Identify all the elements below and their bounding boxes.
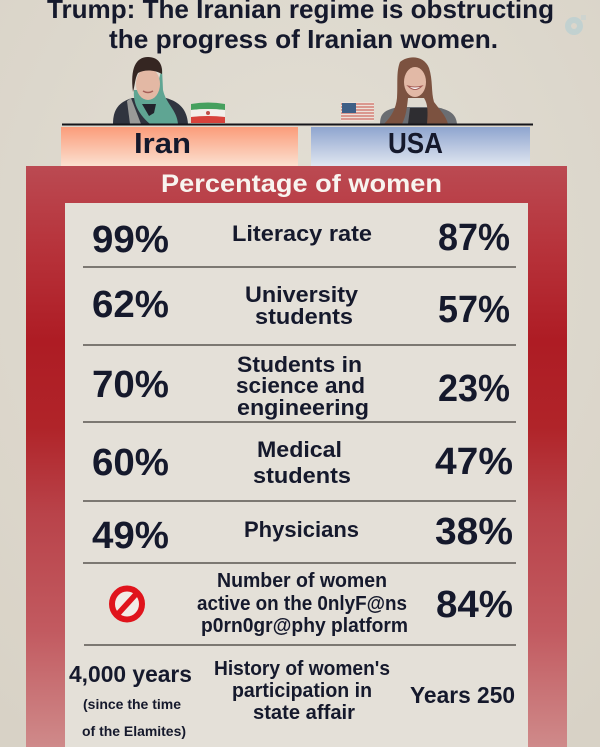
- photo: Iranian woman: [113, 57, 188, 124]
- row: medical students: [92, 437, 513, 488]
- icon: Iran flag: [191, 102, 225, 123]
- row: OnlyFans: Number of women: [217, 570, 387, 592]
- row: university students: 62%: [92, 284, 169, 326]
- row: physicians: Physicians: [244, 517, 359, 542]
- icon: USA flag: [341, 102, 374, 121]
- row: history in state affairs: of the Elamites): [82, 723, 186, 739]
- row: science and engineering: 70%: [92, 364, 169, 406]
- row: science and engineering: Students in: [237, 352, 362, 377]
- row: medical students: 60%: [92, 442, 169, 484]
- row: literacy rate: 87%: [438, 217, 510, 259]
- row: science and engineering: science and: [236, 373, 365, 398]
- row: physicians: 49%: [92, 515, 169, 557]
- title: the progress of Iranian women.: [109, 24, 498, 54]
- row: science and engineering: engineering: [237, 395, 369, 420]
- row: OnlyFans: active on the 0nlyF@ns: [197, 593, 407, 615]
- photo: American woman: [380, 57, 457, 124]
- column header: Iran: [61, 127, 298, 166]
- icon: prohibited sign: [112, 588, 142, 620]
- row: OnlyFans: 84%: [436, 584, 513, 626]
- icon: watermark: [565, 15, 586, 35]
- column header: USA: USA: [388, 128, 443, 160]
- row: university students: students: [255, 304, 353, 329]
- row: university students: University: [245, 282, 359, 307]
- row: history in state affairs: (since the time: [83, 696, 181, 712]
- row: university students: 57%: [438, 289, 510, 331]
- panel: comparison table: [65, 203, 528, 747]
- row: physicians: [92, 511, 513, 557]
- row: history in state affairs: 4,000 years: [69, 661, 192, 687]
- row: science and engineering: [92, 352, 510, 420]
- row: literacy rate: 99%: [92, 219, 169, 261]
- heading: percentage of women: Percentage of women: [161, 170, 442, 198]
- row: history in state affairs: History of women's: [214, 658, 390, 680]
- row: OnlyFans: [112, 570, 513, 637]
- row: medical students: 47%: [435, 441, 513, 483]
- row: medical students: Medical: [257, 437, 342, 462]
- row: medical students: students: [253, 463, 351, 488]
- row: science and engineering: 23%: [438, 368, 510, 410]
- row: history in state affairs: [69, 658, 515, 739]
- row: OnlyFans: p0rn0gr@phy platform: [201, 615, 408, 637]
- row: literacy rate: [92, 217, 510, 261]
- column header: USA: [311, 127, 530, 166]
- row: history in state affairs: participation in: [232, 680, 372, 702]
- row: history in state affairs: state affair: [253, 702, 355, 724]
- row: literacy rate: Literacy rate: [232, 221, 372, 246]
- row: physicians: 38%: [435, 511, 513, 553]
- row: university students: [92, 282, 510, 331]
- row: history in state affairs: Years 250: [410, 682, 515, 708]
- column header: Iran: Iran: [134, 128, 191, 160]
- title: [47, 0, 554, 54]
